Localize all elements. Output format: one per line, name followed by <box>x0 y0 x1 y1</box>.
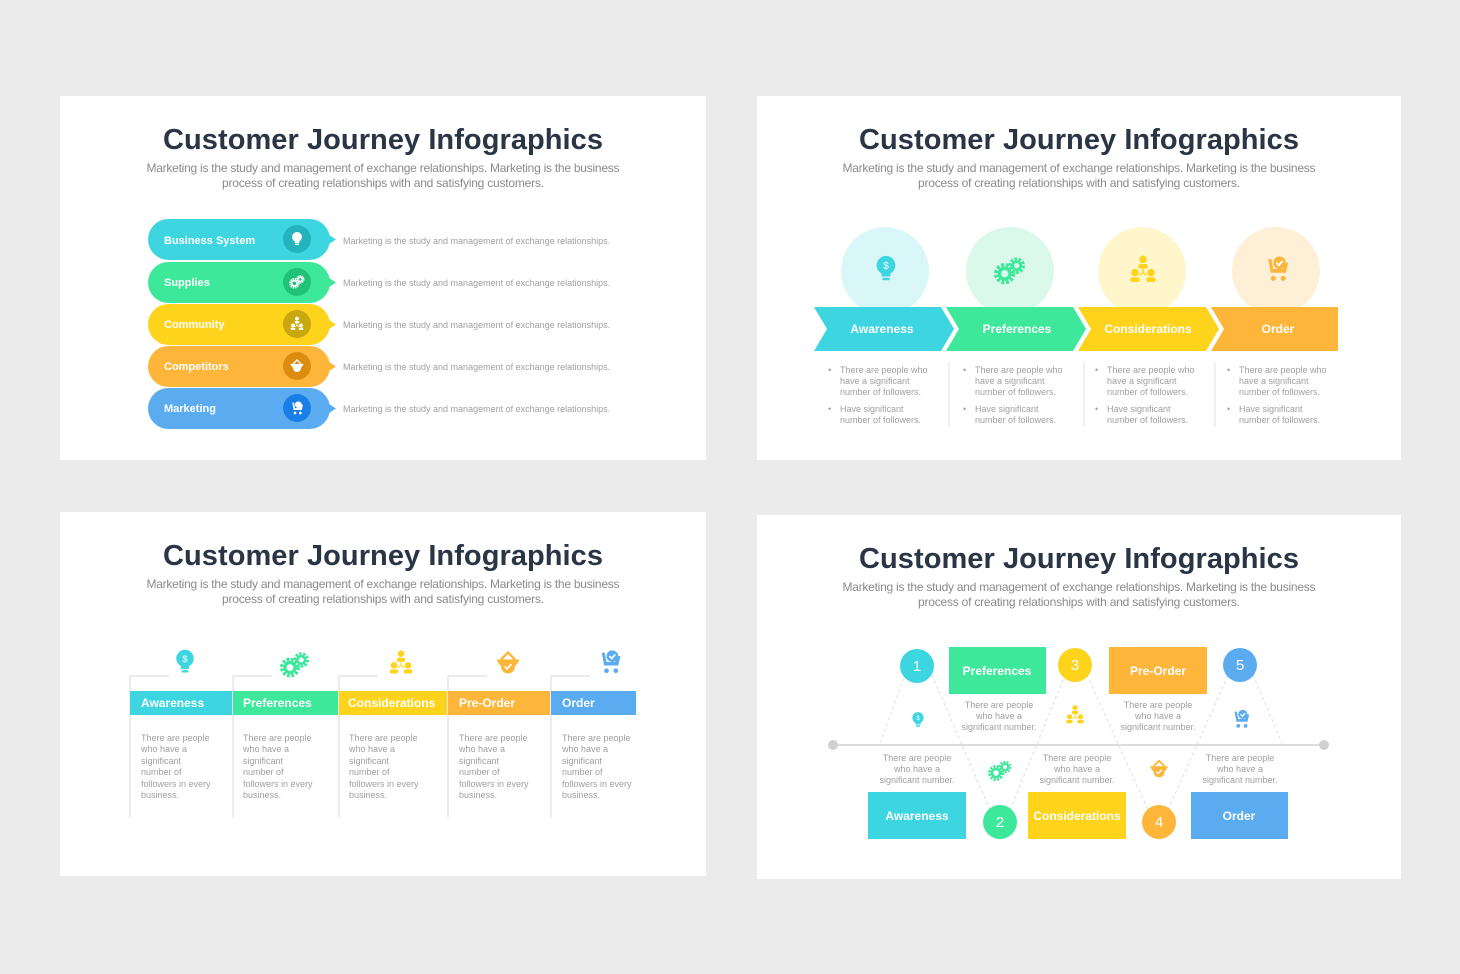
bullet texts: number of followers. <box>840 387 921 397</box>
subtitle: process of creating relationships with and satisfying customers. <box>918 176 1240 190</box>
subtitle: Marketing is the study and management of exchange relationships. Marketing is the business <box>842 580 1316 594</box>
bullet texts: • <box>1095 404 1098 414</box>
column: Considerations: significant <box>349 756 390 766</box>
texts: There are people <box>883 753 951 763</box>
pill: Supplies <box>148 262 610 303</box>
step 1 <box>900 649 934 683</box>
panel: zigzag <box>757 515 1401 879</box>
title: Customer Journey Infographics <box>163 540 603 572</box>
column: Preferences <box>233 654 338 800</box>
column: Order <box>551 650 636 800</box>
column: Awareness: Awareness <box>141 696 204 710</box>
bullet texts: • <box>1227 404 1230 414</box>
bullet texts: number of followers. <box>975 387 1056 397</box>
column: Considerations: number of <box>349 767 390 777</box>
box: Preferences: Preferences <box>963 664 1032 678</box>
column: Considerations <box>339 650 447 800</box>
texts: who have a <box>1134 711 1181 721</box>
step 5 <box>1223 648 1257 682</box>
column: Pre-Order <box>448 652 550 800</box>
column: Awareness: number of <box>141 767 182 777</box>
pill: Community: Community <box>164 319 225 331</box>
column: Order: Order <box>562 696 595 710</box>
pill: Business System: Marketing is the study and management of exchange relationships. <box>343 236 610 246</box>
column: Pre-Order: number of <box>459 767 500 777</box>
title: Customer Journey Infographics <box>163 124 603 156</box>
bullet texts: There are people who <box>1107 365 1195 375</box>
bullet texts: • <box>963 404 966 414</box>
subtitle: process of creating relationships with and satisfying customers. <box>222 176 544 190</box>
bullet texts: Have significant <box>1107 404 1171 414</box>
texts: There are people <box>965 700 1033 710</box>
pill: Marketing: Marketing is the study and management of exchange relationships. <box>343 404 610 414</box>
pill: Community: Marketing is the study and management of exchange relationships. <box>343 320 610 330</box>
column: Awareness: There are people <box>141 733 210 743</box>
bullet texts: Have significant <box>840 404 904 414</box>
bullet texts: There are people who <box>975 365 1063 375</box>
bullet texts: • <box>963 365 966 375</box>
pill: Marketing: Marketing <box>164 403 216 415</box>
step: Considerations <box>1078 227 1219 351</box>
step: Considerations: Considerations <box>1104 322 1192 336</box>
bullet texts: Have significant <box>975 404 1039 414</box>
step 2: 2 <box>996 814 1004 831</box>
title: Customer Journey Infographics <box>859 543 1299 575</box>
bullet texts: have a significant <box>840 376 910 386</box>
texts: There are people <box>1206 753 1274 763</box>
subtitle: process of creating relationships with and satisfying customers. <box>222 592 544 606</box>
column: Awareness: business. <box>141 790 179 800</box>
subtitle: process of creating relationships with and satisfying customers. <box>918 595 1240 609</box>
column: Order: business. <box>562 790 600 800</box>
column: Order: significant <box>562 756 603 766</box>
column: Order: followers in every <box>562 779 632 789</box>
bullet texts: Have significant <box>1239 404 1303 414</box>
column: Pre-Order: followers in every <box>459 779 529 789</box>
column: Preferences: who have a <box>242 744 289 754</box>
step: Preferences: Preferences <box>983 322 1052 336</box>
box: Order <box>1191 792 1288 839</box>
pill: Competitors <box>148 346 610 387</box>
step 3: 3 <box>1071 657 1079 674</box>
column: Preferences: business. <box>243 790 281 800</box>
column: Preferences: number of <box>243 767 284 777</box>
texts: who have a <box>1053 764 1100 774</box>
column: Preferences: significant <box>243 756 284 766</box>
pill: Business System <box>148 219 610 260</box>
texts: who have a <box>975 711 1022 721</box>
bullet texts: There are people who <box>840 365 928 375</box>
box: Considerations <box>1028 792 1126 839</box>
box: Order: Order <box>1223 809 1256 823</box>
bullet texts: have a significant <box>975 376 1045 386</box>
subtitle <box>146 161 620 190</box>
step 1: 1 <box>913 658 921 675</box>
subtitle <box>146 577 620 606</box>
bullet texts: • <box>1227 365 1230 375</box>
step: Awareness <box>814 227 954 351</box>
bullet texts: number of followers. <box>840 415 921 425</box>
column: Awareness <box>130 650 232 800</box>
box: Awareness: Awareness <box>885 809 949 823</box>
bullet texts: number of followers. <box>1239 387 1320 397</box>
panel: list pills <box>60 96 706 460</box>
column: Awareness: who have a <box>140 744 187 754</box>
box: Considerations: Considerations <box>1033 809 1121 823</box>
step: Awareness: Awareness <box>850 322 914 336</box>
pill: Business System: Business System <box>164 235 255 247</box>
bullet texts: number of followers. <box>1239 415 1320 425</box>
panel: timeline columns <box>60 512 706 876</box>
texts: who have a <box>1216 764 1263 774</box>
texts: significant number. <box>961 722 1037 732</box>
step 2 <box>983 805 1017 839</box>
icons <box>912 705 1249 779</box>
column: Considerations: followers in every <box>349 779 419 789</box>
column: Awareness: significant <box>141 756 182 766</box>
step 4: 4 <box>1155 814 1163 831</box>
column: Pre-Order: Pre-Order <box>459 696 515 710</box>
column: Pre-Order: business. <box>459 790 497 800</box>
texts: significant number. <box>879 775 955 785</box>
pill: Supplies: Marketing is the study and management of exchange relationships. <box>343 278 610 288</box>
bullet texts <box>828 365 1327 425</box>
title: Customer Journey Infographics <box>859 124 1299 156</box>
texts: There are people <box>1043 753 1111 763</box>
bullet texts: have a significant <box>1107 376 1177 386</box>
bullet texts: • <box>1095 365 1098 375</box>
bullet texts: number of followers. <box>975 415 1056 425</box>
subtitle: Marketing is the study and management of exchange relationships. Marketing is the business <box>146 577 620 591</box>
box: Pre-Order <box>1109 647 1207 694</box>
bullet texts: • <box>828 365 831 375</box>
subtitle <box>842 580 1316 609</box>
step: Preferences <box>946 227 1086 351</box>
texts: significant number. <box>1039 775 1115 785</box>
pill: Supplies: Supplies <box>164 277 210 289</box>
panel: chevron steps <box>757 96 1401 460</box>
texts: There are people <box>1124 700 1192 710</box>
bullet texts: number of followers. <box>1107 415 1188 425</box>
column: Considerations: There are people <box>349 733 418 743</box>
subtitle: Marketing is the study and management of exchange relationships. Marketing is the business <box>842 161 1316 175</box>
texts: significant number. <box>1120 722 1196 732</box>
column: Order: number of <box>562 767 603 777</box>
step: Order: Order <box>1262 322 1295 336</box>
pill: Competitors: Marketing is the study and management of exchange relationships. <box>343 362 610 372</box>
step 4 <box>1142 805 1176 839</box>
column: Considerations: business. <box>349 790 387 800</box>
pill: Competitors: Competitors <box>164 361 229 373</box>
pill: Community <box>148 304 610 345</box>
bullet texts: • <box>828 404 831 414</box>
column: Pre-Order: who have a <box>458 744 505 754</box>
column: Pre-Order: There are people <box>459 733 528 743</box>
box: Preferences <box>949 647 1046 694</box>
column: Considerations: Considerations <box>348 696 436 710</box>
subtitle <box>842 161 1316 190</box>
column: Preferences: followers in every <box>243 779 313 789</box>
box: Pre-Order: Pre-Order <box>1130 664 1186 678</box>
step 3 <box>1058 648 1092 682</box>
texts: significant number. <box>1202 775 1278 785</box>
column: Preferences: There are people <box>243 733 312 743</box>
column: Preferences: Preferences <box>243 696 312 710</box>
subtitle: Marketing is the study and management of exchange relationships. Marketing is the business <box>146 161 620 175</box>
box: Awareness <box>868 792 966 839</box>
bullet texts: There are people who <box>1239 365 1327 375</box>
step: Order <box>1211 227 1338 351</box>
texts: who have a <box>893 764 940 774</box>
bullet texts: number of followers. <box>1107 387 1188 397</box>
texts <box>879 700 1278 785</box>
column: Considerations: who have a <box>348 744 395 754</box>
column: Order: There are people <box>562 733 631 743</box>
column: Pre-Order: significant <box>459 756 500 766</box>
column: Order: who have a <box>561 744 608 754</box>
pill: Marketing <box>148 388 610 429</box>
bullet texts: have a significant <box>1239 376 1309 386</box>
column: Awareness: followers in every <box>141 779 211 789</box>
step 5: 5 <box>1236 657 1244 674</box>
